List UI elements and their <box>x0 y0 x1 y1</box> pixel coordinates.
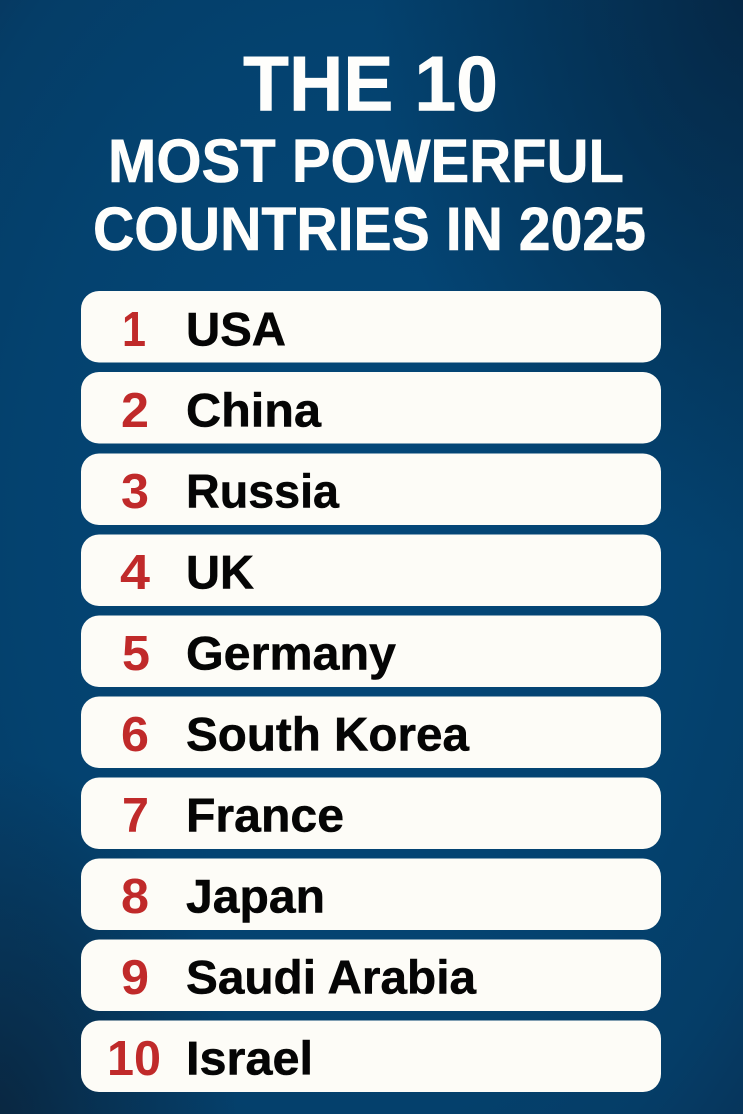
row 10: Israel: Israel <box>186 1032 313 1084</box>
row 1: USA: 1 <box>122 303 146 357</box>
ranking list <box>81 291 661 1092</box>
row 6: South Korea <box>81 696 661 768</box>
title line: THE 10: THE 10 <box>243 40 498 128</box>
row 8: Japan: 8 <box>121 870 149 924</box>
row 2: China <box>81 372 661 444</box>
row 10: Israel <box>81 1020 661 1092</box>
row 7: France: 7 <box>122 789 149 843</box>
row 4: UK: 4 <box>120 546 150 600</box>
row 3: Russia <box>81 454 661 525</box>
row 3: Russia: Russia <box>186 464 340 518</box>
row 2: China: 2 <box>121 384 149 438</box>
row 7: France: France <box>186 788 344 842</box>
row 10: Israel: 10 <box>107 1032 161 1086</box>
row 5: Germany <box>81 616 661 687</box>
title line: MOST POWERFUL: MOST POWERFUL <box>108 127 624 195</box>
row 6: South Korea: South Korea <box>186 708 470 760</box>
title line: COUNTRIES IN 2025: COUNTRIES IN 2025 <box>93 195 646 263</box>
row 9: Saudi Arabia <box>81 940 661 1011</box>
row 1: USA <box>81 291 661 362</box>
row 5: Germany: 5 <box>122 627 150 681</box>
row 3: Russia: 3 <box>121 465 149 519</box>
row 5: Germany: Germany <box>186 626 396 680</box>
row 6: South Korea: 6 <box>121 708 149 762</box>
row 9: Saudi Arabia: 9 <box>121 951 149 1005</box>
row 8: Japan: Japan <box>186 870 325 922</box>
row 4: UK: UK <box>186 546 254 598</box>
title <box>93 40 646 263</box>
row 1: USA: USA <box>186 302 286 356</box>
row 9: Saudi Arabia: Saudi Arabia <box>186 950 477 1004</box>
row 7: France <box>81 778 661 849</box>
row 4: UK <box>81 534 661 606</box>
row 2: China: China <box>186 384 322 436</box>
row 8: Japan <box>81 858 661 930</box>
